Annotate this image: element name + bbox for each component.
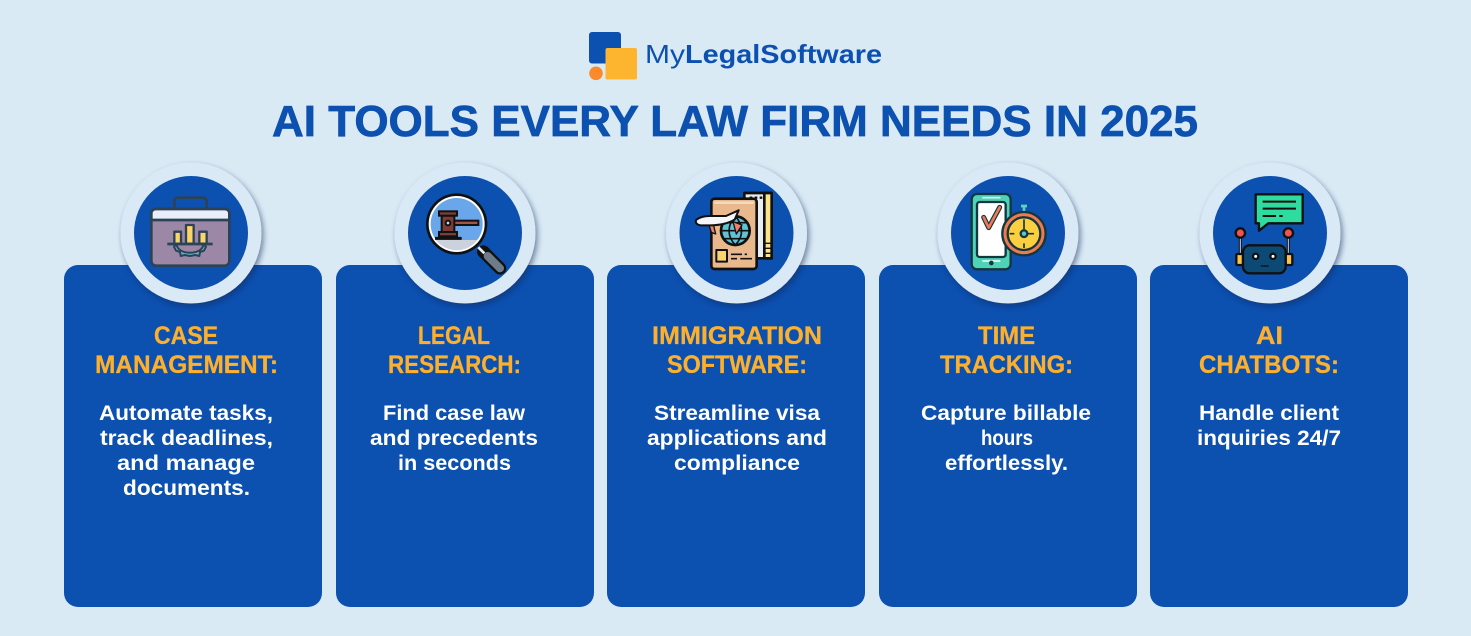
description: inquiries 24/7 [1197, 427, 1341, 450]
icon: briefcase with chart and gear [151, 198, 229, 266]
heading: CHATBOTS: [1199, 351, 1339, 379]
heading: TRACKING: [940, 351, 1073, 379]
heading [95, 322, 278, 379]
heading: MANAGEMENT: [95, 351, 278, 379]
description: hours [981, 427, 1033, 450]
heading: LEGAL [418, 322, 490, 350]
icon: phone and stopwatch [972, 194, 1046, 269]
description [370, 402, 538, 475]
description: Find case law [383, 402, 526, 425]
description: Capture billable [921, 402, 1091, 425]
heading: RESEARCH: [388, 351, 521, 379]
panel: ai chatbots [1150, 162, 1408, 607]
description: compliance [674, 452, 800, 475]
description: track deadlines, [100, 427, 273, 450]
heading: AI [1256, 322, 1283, 350]
title: AI TOOLS EVERY LAW FIRM NEEDS IN 2025 [272, 97, 1198, 146]
heading [388, 322, 521, 379]
heading [652, 322, 822, 379]
panel: immigration software [607, 162, 865, 607]
description: Streamline visa [654, 402, 820, 425]
heading [1199, 322, 1339, 379]
description: Handle client [1199, 402, 1339, 425]
description: Automate tasks, [99, 402, 273, 425]
description [1197, 402, 1341, 450]
icon: magnifier over gavel [426, 193, 500, 268]
description: and precedents [370, 427, 538, 450]
panel: legal research [336, 162, 594, 607]
description: in seconds [398, 452, 511, 475]
description: effortlessly. [945, 452, 1068, 475]
logo: LegalSoftware [685, 39, 882, 69]
description [921, 402, 1091, 475]
heading: SOFTWARE: [667, 351, 807, 379]
logo: My [645, 39, 685, 69]
logo [589, 32, 882, 80]
description: and manage [117, 452, 255, 475]
description: documents. [123, 477, 250, 500]
description: applications and [647, 427, 827, 450]
description [647, 402, 827, 475]
icon: passport and plane [696, 193, 772, 269]
heading [940, 322, 1073, 379]
heading: CASE [154, 322, 218, 350]
heading: IMMIGRATION [652, 322, 822, 350]
panel: case management [64, 162, 322, 607]
heading: TIME [978, 322, 1035, 350]
icon: robot with chat bubble [1236, 194, 1303, 273]
description [99, 402, 273, 500]
panel: time tracking [879, 162, 1137, 607]
